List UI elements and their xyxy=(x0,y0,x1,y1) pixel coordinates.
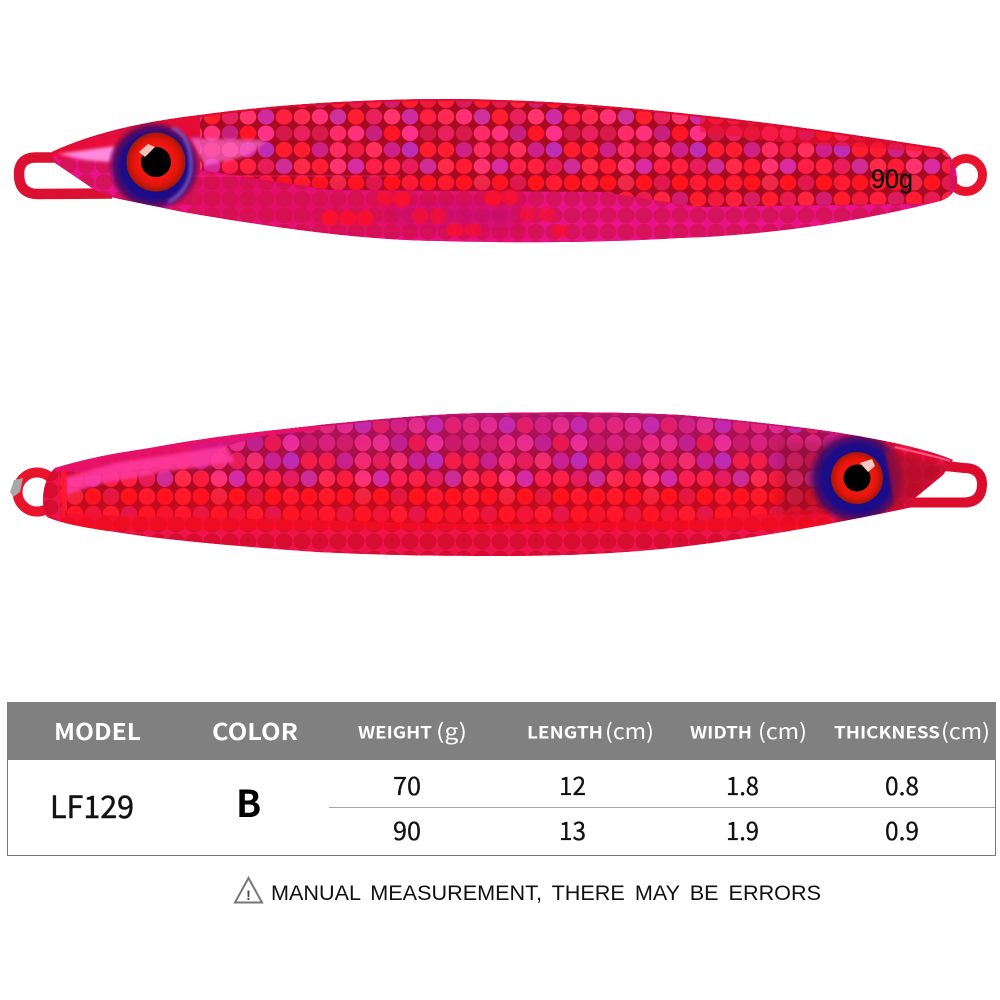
hook eye: top lure left loop xyxy=(19,158,112,194)
row: 70 g xyxy=(393,767,919,803)
row: 90 g xyxy=(393,812,919,848)
label: 90g stamp: 90g xyxy=(871,164,913,194)
header: width xyxy=(690,716,807,746)
body: top lure xyxy=(52,99,958,242)
lure: bottom, eye right xyxy=(10,405,982,565)
header: color: COLOR xyxy=(212,713,298,747)
header: length: LENGTH xyxy=(527,718,603,744)
icon: eye of top lure xyxy=(126,128,191,202)
row: 90 g: 0.9 xyxy=(885,812,919,848)
icon: warning triangle: ! xyxy=(246,887,251,903)
header: width: (cm) xyxy=(758,716,807,746)
row: 90 g: 13 xyxy=(559,812,586,848)
row: 90 g: 1.9 xyxy=(726,812,759,848)
icon: eye of bottom lure xyxy=(831,452,883,504)
lure: top, eye left, 90g xyxy=(19,90,982,250)
cell: color value: B xyxy=(236,774,261,828)
row: 70 g: 1.8 xyxy=(726,767,759,803)
text: measurement disclaimer: MANUAL MEASUREMENT, THERE MAY BE ERRORS xyxy=(271,881,821,905)
header: weight xyxy=(358,716,467,746)
row: 70 g: 0.8 xyxy=(885,767,919,803)
header: model: MODEL xyxy=(54,713,141,747)
disclaimer note xyxy=(235,878,821,905)
row: 70 g: 12 xyxy=(559,767,586,803)
cell: model value: LF129 xyxy=(50,782,134,827)
header: width: WIDTH xyxy=(690,718,752,744)
header: thickness: THICKNESS xyxy=(834,718,940,744)
header: thickness: (cm) xyxy=(941,716,990,746)
table frame xyxy=(8,702,996,856)
header: weight: WEIGHT xyxy=(358,718,432,744)
ring: bottom lure left xyxy=(18,472,56,512)
body: bottom lure xyxy=(43,412,953,556)
row: 70 g: 70 xyxy=(393,767,421,803)
header: length xyxy=(527,716,654,746)
header: length: (cm) xyxy=(605,716,654,746)
row divider xyxy=(329,807,995,808)
icon: warning triangle xyxy=(235,878,262,903)
spec table xyxy=(7,702,996,856)
mark: bare metal on ring xyxy=(10,478,23,497)
ring: top lure right xyxy=(950,158,982,192)
row: 90 g: 90 xyxy=(393,812,421,848)
header: weight: (g) xyxy=(436,716,467,746)
hook eye: bottom lure right loop xyxy=(905,466,982,502)
table header bar xyxy=(7,702,996,760)
header: thickness xyxy=(834,716,990,746)
